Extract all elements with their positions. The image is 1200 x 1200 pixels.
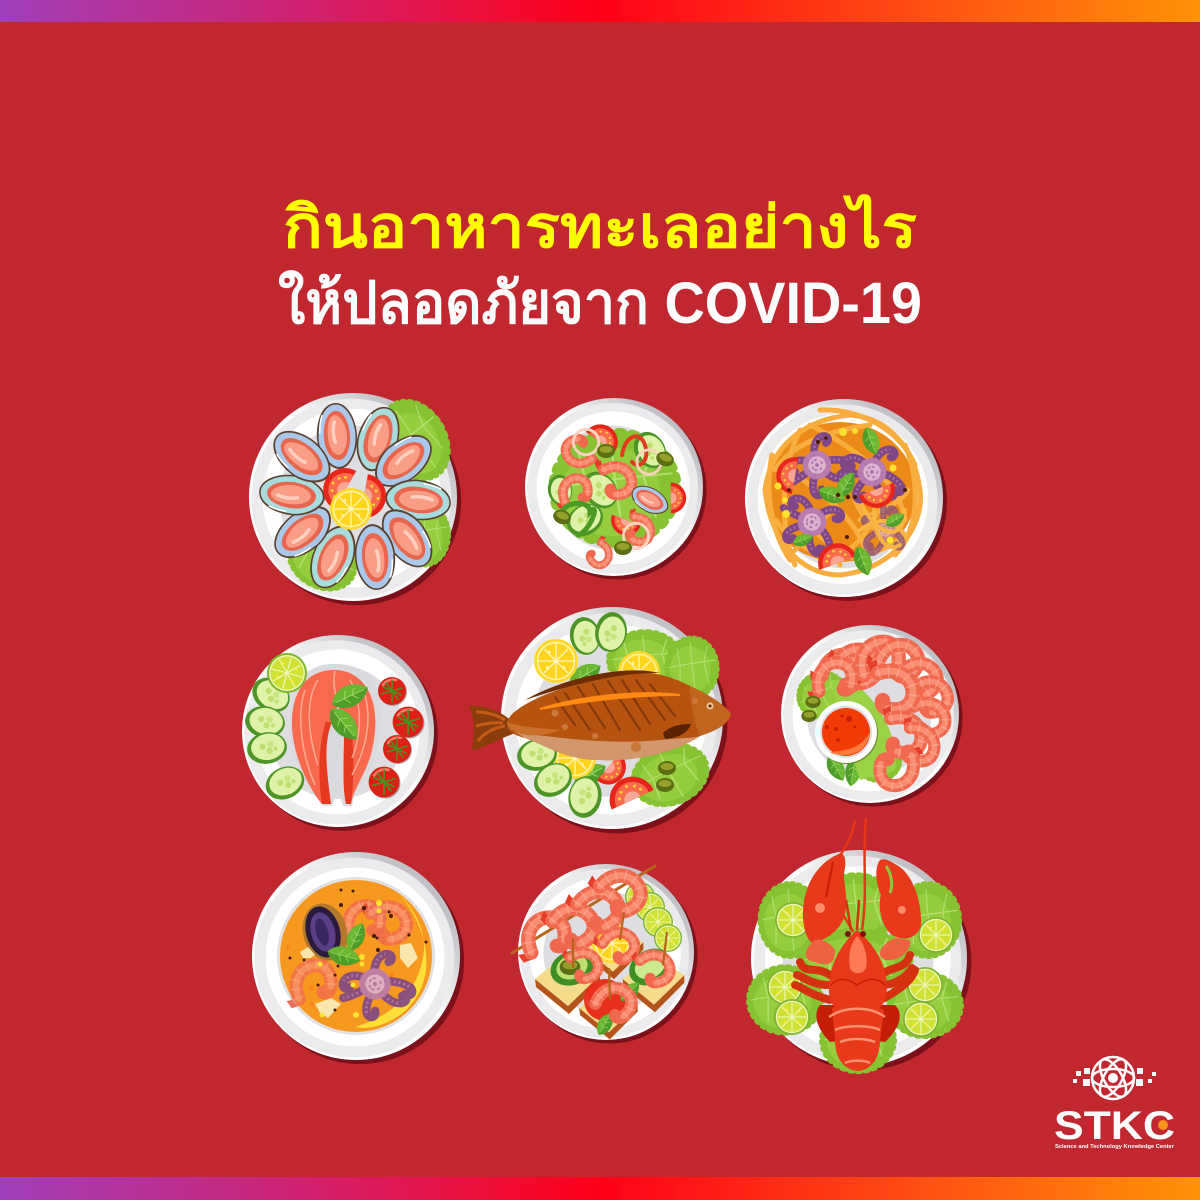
olives <box>656 761 676 792</box>
tail segments <box>832 1004 884 1071</box>
tomato wedges <box>315 460 390 521</box>
pepper and corn <box>774 428 907 544</box>
carapace <box>829 930 887 1015</box>
orange stripe <box>540 693 680 709</box>
lemon slice <box>330 488 372 530</box>
lettuce <box>565 632 718 815</box>
fish body <box>507 672 731 760</box>
fish <box>469 670 731 760</box>
plate: shrimp canapes <box>511 857 698 1044</box>
pepper and corn <box>288 888 428 1018</box>
plate: salmon steak <box>242 635 438 831</box>
basil leaves <box>791 425 907 578</box>
plate base <box>751 850 971 1070</box>
plate: seafood soup <box>252 852 464 1064</box>
lime wedge <box>263 649 311 697</box>
grill marks <box>555 680 675 730</box>
cucumbers <box>546 426 672 542</box>
dark mussel <box>296 898 354 966</box>
lettuce <box>792 666 900 788</box>
lettuce <box>749 875 961 1072</box>
tomato pieces <box>586 417 686 540</box>
belly spots <box>552 698 698 752</box>
octopus <box>338 947 418 1023</box>
skewered shrimps <box>511 857 647 963</box>
mussel <box>627 480 673 520</box>
onion rings <box>573 429 661 549</box>
basil leaves <box>325 920 370 969</box>
salmon steak <box>290 664 381 806</box>
olives <box>801 696 821 722</box>
title line 1: กินอาหารทะเลอย่างไร <box>283 194 917 260</box>
plate: lobster <box>749 818 971 1072</box>
tagline: Science and Technology Knowledge Center <box>1055 1144 1175 1150</box>
lime slices <box>625 882 682 952</box>
toasts <box>535 922 684 1039</box>
title line 2: ให้ปลอดภัยจาก COVID-19 <box>278 269 922 336</box>
cherry tomatoes <box>369 677 424 798</box>
top gradient bar <box>0 0 1200 22</box>
logo: STKC <box>1054 1055 1175 1150</box>
plate base <box>518 864 698 1044</box>
plate base <box>242 635 438 831</box>
canape shrimps and picks <box>560 912 675 1026</box>
lobster legs <box>795 955 915 1000</box>
cucumbers <box>515 610 630 820</box>
lettuce <box>554 432 676 544</box>
octopus pieces <box>771 432 917 567</box>
pepper strips <box>560 436 646 535</box>
right claw <box>876 859 921 938</box>
noodles over octopus <box>860 500 905 547</box>
plate base <box>501 607 727 833</box>
plate base <box>249 393 461 605</box>
lettuce <box>279 390 461 601</box>
atom icon <box>1092 1055 1134 1101</box>
plate: grilled fish <box>469 607 731 833</box>
fish head <box>690 686 731 736</box>
toppings <box>546 923 678 1038</box>
tomato wedges <box>773 454 900 570</box>
pasta nest <box>764 410 920 575</box>
plate: mussels <box>249 390 461 605</box>
tail fans <box>816 1005 850 1042</box>
shrimps <box>805 631 953 788</box>
fish tail <box>469 706 518 750</box>
shrimps <box>279 889 412 1009</box>
orange dot <box>1158 1120 1168 1130</box>
lobster <box>795 818 921 1071</box>
plate: seafood spaghetti <box>745 399 947 601</box>
lemon slices <box>534 639 660 779</box>
basil leaves <box>323 678 372 746</box>
cucumbers <box>243 671 310 806</box>
tomato wedges <box>597 753 654 809</box>
mussels ring <box>257 401 453 595</box>
lime slices <box>767 902 954 1037</box>
shrimps <box>551 434 654 569</box>
bottom gradient bar <box>0 1177 1200 1200</box>
skewer <box>512 866 655 953</box>
title <box>278 194 922 336</box>
antennae <box>825 818 866 932</box>
pixel squares <box>1073 1068 1156 1086</box>
plate: seafood salad <box>525 398 707 580</box>
plate: shrimp with sauce <box>781 625 963 807</box>
plate base <box>745 399 947 601</box>
left claw <box>803 853 846 943</box>
olives <box>551 444 676 555</box>
plate base <box>781 625 963 807</box>
sauce bowl <box>815 701 878 764</box>
plate base <box>525 398 707 580</box>
wordmark: STKC <box>1054 1104 1175 1148</box>
potato chunks <box>300 943 418 1018</box>
plate base <box>252 852 464 1064</box>
soup <box>277 877 435 1035</box>
